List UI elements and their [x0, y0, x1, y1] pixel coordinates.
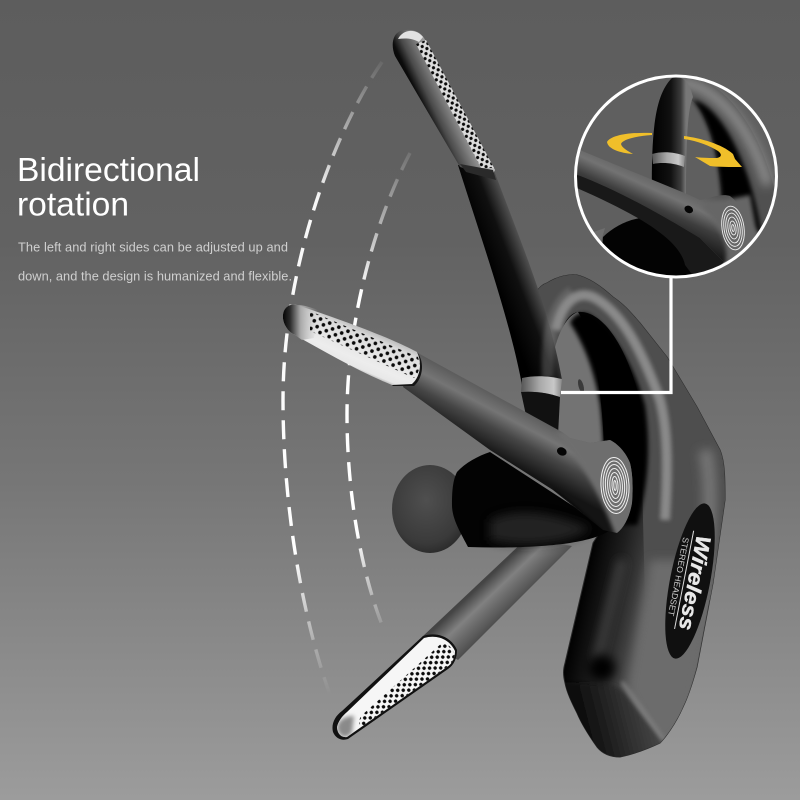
- base face: [564, 680, 662, 756]
- dark spot: [589, 655, 615, 681]
- upper mic dots: [416, 40, 494, 168]
- wireless label plate: STEREO HEADSET: [666, 537, 691, 617]
- upper microphone boom (ghost position): [393, 30, 562, 385]
- main silver mic head: [283, 305, 422, 386]
- lower microphone boom (ghost position): [332, 538, 572, 740]
- lower streak: [597, 560, 622, 660]
- detail hole: [684, 206, 693, 214]
- hook inner window: [550, 312, 604, 443]
- metal ring: [521, 376, 562, 397]
- detail earbud: [602, 218, 692, 276]
- label text: Wireless: [674, 534, 715, 632]
- title: [17, 152, 200, 224]
- outer dashed rotation arc: [283, 62, 382, 695]
- mic hole: [556, 446, 568, 457]
- inner dashed rotation arc: [347, 153, 410, 630]
- lower silver mic head: [332, 634, 457, 740]
- lower right fill: [628, 560, 716, 750]
- ridge highlight: [622, 682, 664, 740]
- ear tip: [392, 465, 468, 553]
- description: The left and right sides can be adjusted up and: [18, 240, 288, 254]
- wireless label plate: [655, 500, 725, 662]
- detail hook tube: [652, 77, 693, 200]
- earbud: [392, 452, 610, 553]
- description: down, and the design is humanized and flexible.: [18, 268, 292, 284]
- rotation arrow: [607, 133, 742, 167]
- title: rotation: [17, 186, 129, 224]
- callout detail circle: [570, 74, 782, 285]
- translucent hook overlay: [548, 292, 572, 378]
- description: [18, 240, 292, 284]
- fingerprint button: [600, 457, 630, 514]
- earbud housing: [452, 452, 610, 547]
- hook grey tube: [524, 274, 725, 600]
- headset body and ear hook: [521, 274, 726, 758]
- detail ear hook: [682, 78, 774, 226]
- main microphone arm: [403, 353, 633, 533]
- hook highlight: [556, 295, 667, 520]
- title: Bidirectional: [17, 152, 200, 189]
- detail metal ring: [652, 152, 685, 167]
- hook black band: [570, 313, 648, 525]
- detail fingerprint: [721, 206, 745, 250]
- detail arm: [577, 150, 734, 262]
- callout connector line: [561, 278, 671, 392]
- sound slot: [577, 379, 585, 393]
